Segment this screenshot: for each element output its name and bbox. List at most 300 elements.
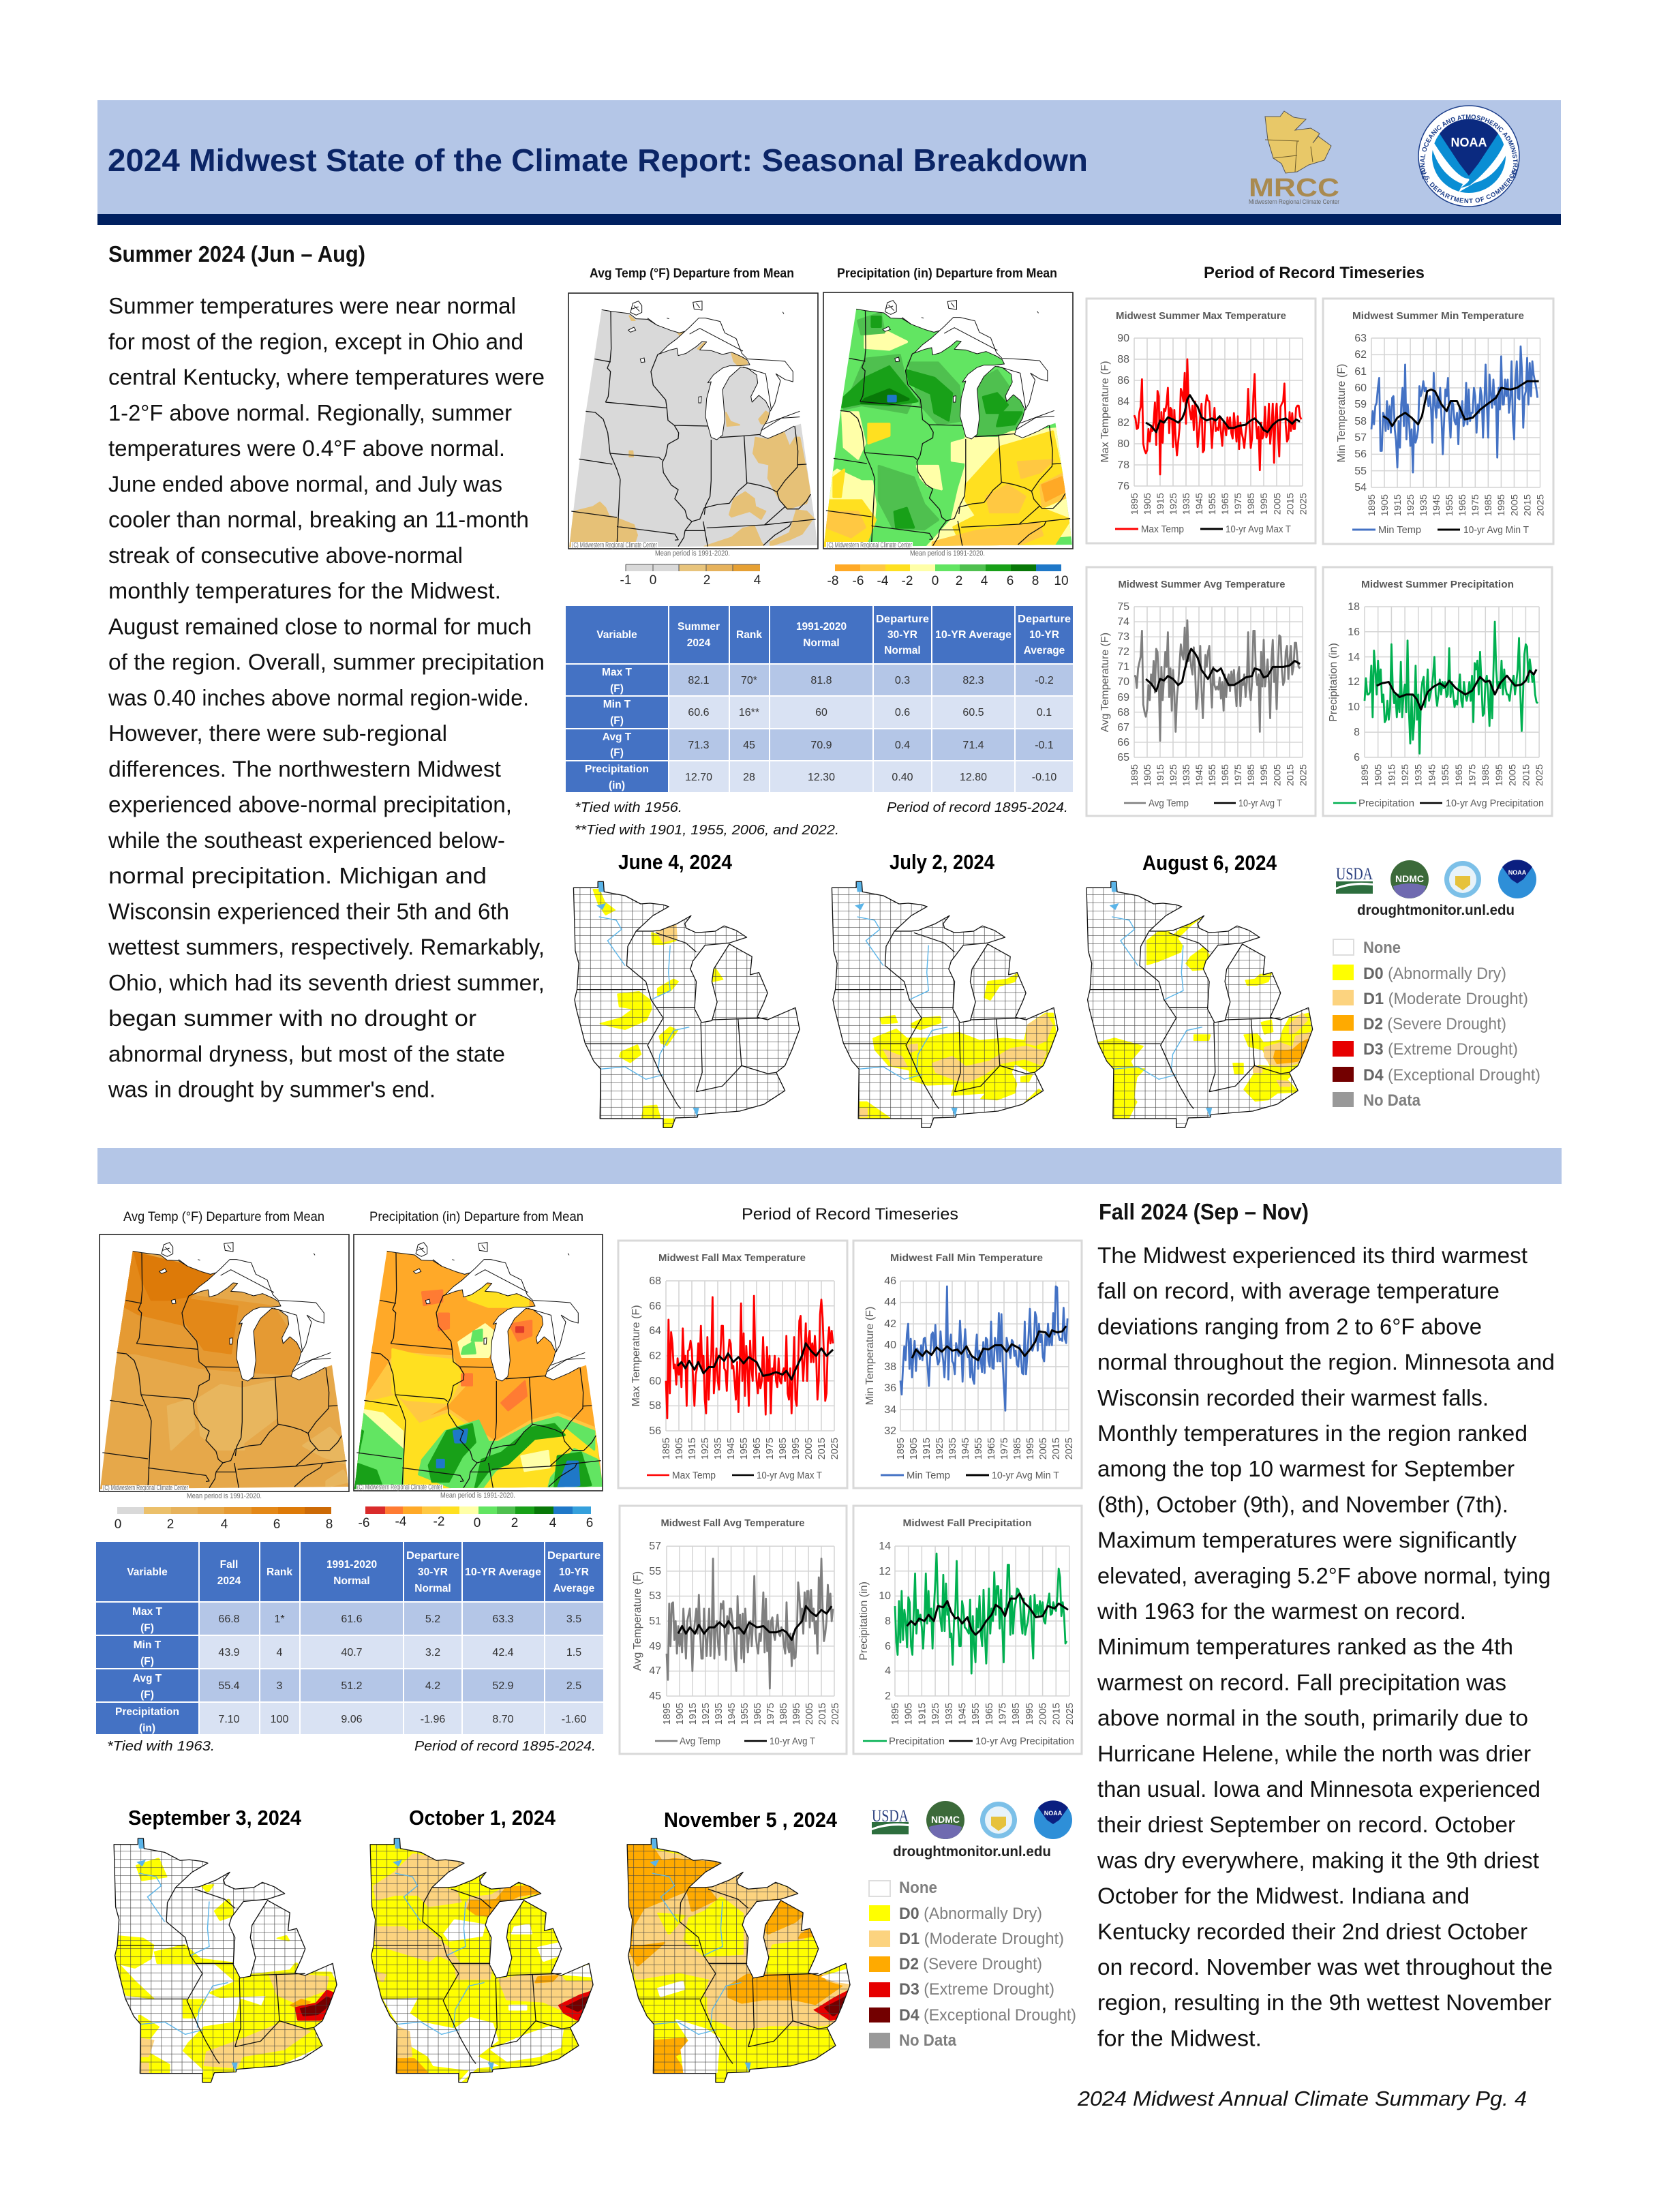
chart: Midwest Fall Avg Temperature: 45 <box>649 1691 661 1702</box>
chart: Midwest Fall Avg Temperature: 1975 <box>765 1703 776 1725</box>
table: fall statistics: 7.10 <box>218 1714 240 1725</box>
colour legend: summer temperature: -1 <box>620 573 631 588</box>
table: fall statistics: 4 <box>277 1647 283 1658</box>
chart: Midwest Fall Precipitation: Midwest Fall Precipitation <box>902 1517 1032 1529</box>
text block: fall summary: Wisconsin recorded their warmest falls. <box>1097 1385 1489 1410</box>
chart: Midwest Summer Avg Temperature: 1985 <box>1246 764 1257 786</box>
colour legend: fall temperature: 4 <box>221 1517 228 1532</box>
map panel: summer precipitation departure <box>814 267 1078 558</box>
logos: drought monitor partners, fall: NOAA <box>1044 1810 1063 1817</box>
chart: Midwest Fall Avg Temperature: 49 <box>649 1641 661 1652</box>
chart: Midwest Summer Min Temperature: 2015 <box>1522 494 1533 516</box>
table: fall statistics: Rank <box>267 1566 292 1578</box>
chart: Midwest Summer Precipitation: 2005 <box>1508 764 1519 786</box>
chart: Midwest Fall Min Temperature: 2025 <box>1064 1438 1075 1459</box>
chart: Midwest Summer Precipitation: 1895 <box>1360 764 1371 786</box>
chart: Midwest Summer Precipitation: Precipitation (in) <box>1328 643 1339 722</box>
drought map: October 1, 2024 <box>356 1825 603 2095</box>
heading: period of record timeseries, summer: Period of Record Timeseries <box>1204 264 1425 282</box>
header banner <box>0 0 1561 225</box>
chart: Midwest Fall Precipitation: 12 <box>879 1566 891 1577</box>
text block: summer summary: However, there were sub-regional <box>108 721 447 746</box>
chart: Midwest Summer Min Temperature: 1975 <box>1470 494 1481 516</box>
chart: Midwest Summer Min Temperature: 55 <box>1354 466 1367 477</box>
chart: Midwest Summer Min Temperature: 59 <box>1354 399 1367 410</box>
chart: Midwest Fall Max Temperature: 68 <box>649 1275 661 1287</box>
chart: Midwest Summer Max Temperature: 76 <box>1117 481 1129 492</box>
map panel: fall precipitation departure: Mean period is 1991-2020. <box>440 1491 515 1500</box>
chart: Midwest Fall Precipitation: 1945 <box>957 1703 968 1725</box>
drought map: November 5, 2024 <box>613 1825 860 2095</box>
chart: Midwest Fall Min Temperature: 1975 <box>999 1438 1010 1459</box>
chart: Midwest Fall Precipitation: 2025 <box>1065 1703 1076 1725</box>
table: summer statistics: Normal <box>803 637 840 649</box>
table: fall statistics: 55.4 <box>218 1680 240 1692</box>
chart: Midwest Fall Min Temperature: 40 <box>884 1339 896 1351</box>
chart: Midwest Summer Avg Temperature: 2005 <box>1272 764 1283 786</box>
page footer: 2024 Midwest Annual Climate Summary Pg. 4 <box>1077 2087 1527 2110</box>
heading: November 5, 2024: November 5 , 2024 <box>664 1808 838 1832</box>
chart: Midwest Summer Avg Temperature: 68 <box>1117 707 1129 718</box>
chart: Midwest Fall Avg Temperature: 1925 <box>701 1703 712 1725</box>
chart: Midwest Fall Precipitation: 6 <box>885 1641 891 1652</box>
chart: Midwest Summer Avg Temperature <box>1086 567 1316 816</box>
table: summer statistics: 10-YR <box>1029 629 1059 641</box>
table: summer statistics: 71.4 <box>962 740 984 751</box>
map panel: summer precipitation departure: (C) Midwestern Regional Climate Center <box>827 541 912 549</box>
text block: fall summary <box>1097 1243 1555 2050</box>
table: summer statistics: 70.9 <box>810 740 832 751</box>
chart: Midwest Fall Max Temperature: 1975 <box>765 1438 776 1459</box>
chart: Midwest Fall Precipitation: 8 <box>885 1616 891 1627</box>
chart: Midwest Fall Max Temperature: 2025 <box>830 1438 840 1459</box>
text block: fall summary: Monthly temperatures in the region ranked <box>1097 1421 1527 1446</box>
chart: Midwest Fall Max Temperature: 62 <box>649 1350 661 1362</box>
chart: Midwest Fall Min Temperature: 34 <box>884 1404 896 1416</box>
logos: drought monitor partners, fall: droughtmonitor.unl.edu <box>893 1844 1051 1860</box>
chart: Midwest Fall Avg Temperature: Avg Temp <box>680 1736 720 1747</box>
chart: Midwest Summer Min Temperature: 61 <box>1354 366 1367 378</box>
table: fall statistics: Variable <box>127 1566 168 1578</box>
text block: fall summary: among the top 10 warmest for September <box>1097 1456 1515 1481</box>
table: summer statistics: 82.3 <box>962 675 984 686</box>
chart: Midwest Summer Min Temperature: 57 <box>1354 432 1367 444</box>
chart: Midwest Summer Avg Temperature: 1995 <box>1259 764 1270 786</box>
text block: summer summary: June ended above normal, and July was <box>108 471 502 496</box>
map panel: summer average temperature departure: (C) Midwestern Regional Climate Center <box>572 541 657 549</box>
table: fall statistics: (F) <box>140 1622 154 1634</box>
chart: Midwest Fall Avg Temperature: 57 <box>649 1541 661 1552</box>
text block: summer summary: of the region. Overall, summer precipitation <box>108 649 545 675</box>
table: fall statistics: 8.70 <box>492 1714 514 1725</box>
chart: Midwest Summer Max Temperature: 1905 <box>1142 493 1153 515</box>
table: fall statistics: Normal <box>333 1575 370 1587</box>
chart: Midwest Fall Min Temperature: 10-yr Avg Min T <box>992 1470 1059 1481</box>
text block: summer summary: cooler than normal, breaking an 11-month <box>108 507 529 532</box>
table: fall statistics: 40.7 <box>341 1647 363 1658</box>
chart: Midwest Summer Min Temperature: 54 <box>1354 482 1367 494</box>
colour legend: fall precipitation: -6 <box>359 1516 369 1530</box>
chart: Midwest Summer Max Temperature: 1975 <box>1233 493 1244 515</box>
colour legend: summer precipitation: -2 <box>902 574 913 588</box>
chart: Midwest Summer Max Temperature: 1945 <box>1194 493 1205 515</box>
table: fall statistics: (F) <box>140 1689 154 1701</box>
legend: drought categories, fall: D2 (Severe Drought) <box>899 1955 1042 1973</box>
chart: Midwest Summer Avg Temperature: 70 <box>1117 676 1129 688</box>
text block: summer summary: experienced above-normal precipitation, <box>108 792 512 817</box>
text block: fall summary: normal throughout the region. Minnesota and <box>1097 1350 1555 1375</box>
chart: Midwest Summer Min Temperature: 1985 <box>1483 494 1494 516</box>
chart: Midwest Summer Max Temperature: 2025 <box>1298 493 1309 515</box>
legend: drought categories, fall: D1 (Moderate Drought) <box>899 1930 1064 1948</box>
legend: drought categories, summer: None <box>1363 939 1401 957</box>
table: summer statistics: Max T <box>602 667 632 678</box>
text block: summer summary: differences. The northwestern Midwest <box>108 756 501 781</box>
table: fall statistics: 5.2 <box>425 1613 440 1625</box>
chart: Midwest Summer Avg Temperature: 71 <box>1117 661 1129 673</box>
table: summer statistics: 81.8 <box>810 675 832 686</box>
chart: Midwest Summer Min Temperature: Midwest Summer Min Temperature <box>1352 310 1524 322</box>
map panel: fall average temperature departure: Mean period is 1991-2020. <box>187 1492 262 1500</box>
colour legend: summer precipitation: -4 <box>877 574 889 588</box>
legend: drought categories, summer: D3 (Extreme Drought) <box>1363 1040 1518 1059</box>
text block: summer summary: was in drought by summer's end. <box>108 1077 436 1102</box>
chart: Midwest Fall Max Temperature: 60 <box>649 1376 661 1387</box>
chart: Midwest Summer Avg Temperature: 1945 <box>1194 764 1205 786</box>
chart: Midwest Fall Max Temperature: 1925 <box>700 1438 711 1459</box>
chart: Midwest Summer Max Temperature: 10-yr Avg Max T <box>1226 524 1291 535</box>
table: fall statistics: Avg T <box>133 1673 162 1684</box>
chart: Midwest Summer Min Temperature: 2005 <box>1509 494 1520 516</box>
legend: drought categories, summer: D4 (Exceptional Drought) <box>1363 1066 1540 1085</box>
chart: Midwest Summer Max Temperature: 78 <box>1117 459 1129 471</box>
table: summer statistics: (F) <box>610 683 624 695</box>
chart: Midwest Fall Avg Temperature: 53 <box>649 1590 661 1602</box>
table: summer statistics: 0.4 <box>895 740 910 751</box>
table: summer statistics: (F) <box>610 715 624 727</box>
chart: Midwest Summer Max Temperature: 1985 <box>1246 493 1257 515</box>
table: summer statistics: Precipitation <box>585 763 649 775</box>
legend: drought categories, fall: D0 (Abnormally Dry) <box>899 1905 1042 1923</box>
chart: Midwest Summer Avg Temperature: 1965 <box>1220 764 1231 786</box>
chart: Midwest Fall Avg Temperature: 1995 <box>791 1703 802 1725</box>
chart: Midwest Summer Min Temperature: Min Temperature (F) <box>1336 364 1348 462</box>
chart: Midwest Summer Precipitation: 8 <box>1354 727 1360 738</box>
chart: Midwest Fall Min Temperature: Min Temp <box>907 1470 950 1481</box>
table: fall statistics: (in) <box>139 1723 155 1734</box>
map panel: summer precipitation departure: Mean period is 1991-2020. <box>910 549 985 558</box>
table: summer statistics: -0.2 <box>1035 675 1054 686</box>
text block: summer summary: August remained close to normal for much <box>108 613 532 639</box>
colour legend: fall temperature: 2 <box>167 1517 174 1532</box>
chart: Midwest Fall Precipitation: 1965 <box>984 1703 995 1725</box>
heading: July 2, 2024: July 2, 2024 <box>890 850 995 874</box>
table: fall statistics <box>96 1542 603 1734</box>
table: fall statistics: Normal <box>414 1583 451 1594</box>
chart: Midwest Summer Max Temperature: 84 <box>1117 396 1129 408</box>
chart: Midwest Fall Min Temperature: 1965 <box>986 1438 997 1459</box>
table: fall statistics: 61.6 <box>341 1613 363 1625</box>
chart: Midwest Summer Precipitation: 16 <box>1348 626 1360 638</box>
text block: summer summary: wettest summers, respectively. Remarkably, <box>108 934 545 960</box>
chart: Midwest Fall Avg Temperature: Midwest Fall Avg Temperature <box>661 1517 804 1529</box>
chart: Midwest Summer Avg Temperature: 2025 <box>1298 764 1309 786</box>
chart: Midwest Summer Avg Temperature: 2015 <box>1285 764 1296 786</box>
chart: Midwest Summer Precipitation: 1965 <box>1454 764 1465 786</box>
chart: Midwest Fall Avg Temperature: 1965 <box>753 1703 763 1725</box>
chart: Midwest Fall Avg Temperature: 1905 <box>675 1703 686 1725</box>
table: summer statistics: 12.30 <box>808 772 835 783</box>
chart: Midwest Fall Max Temperature: 10-yr Avg Max T <box>757 1470 822 1481</box>
table: summer statistics: Departure <box>876 613 929 625</box>
table: summer statistics: (F) <box>610 747 624 759</box>
chart: Midwest Fall Max Temperature: Max Temp <box>672 1470 716 1481</box>
table: summer statistics: -0.10 <box>1032 772 1056 783</box>
table: fall statistics: 30-YR <box>418 1566 448 1578</box>
chart: Midwest Summer Min Temperature: 1935 <box>1418 494 1429 516</box>
chart: Midwest Summer Avg Temperature: 1955 <box>1207 764 1218 786</box>
colour legend: summer temperature <box>620 564 761 588</box>
chart: Midwest Fall Precipitation: 1955 <box>971 1703 982 1725</box>
chart: Midwest Fall Min Temperature: 1955 <box>973 1438 984 1459</box>
table: summer statistics: 82.1 <box>688 675 710 686</box>
colour legend: summer precipitation: 10 <box>1054 574 1069 588</box>
table: fall statistics: (F) <box>140 1656 154 1667</box>
map panel: summer average temperature departure <box>559 267 823 558</box>
chart: Midwest Fall Min Temperature <box>853 1241 1082 1488</box>
chart: Midwest Fall Min Temperature: 42 <box>884 1318 896 1330</box>
text block: summer summary: monthly temperatures for the Midwest. <box>108 578 501 603</box>
chart: Midwest Fall Min Temperature: 44 <box>884 1297 896 1308</box>
chart: Midwest Summer Precipitation: 1995 <box>1494 764 1505 786</box>
chart: Midwest Fall Precipitation: 10 <box>879 1590 891 1602</box>
colour legend: fall precipitation: 6 <box>586 1516 593 1530</box>
table: summer statistics: 0.40 <box>892 772 913 783</box>
chart: Midwest Summer Precipitation: 1915 <box>1386 764 1397 786</box>
table: fall statistics: 100 <box>271 1714 288 1725</box>
logo: MRCC <box>1249 111 1339 205</box>
chart: Midwest Summer Avg Temperature: 74 <box>1117 616 1129 628</box>
chart: Midwest Summer Min Temperature: 10-yr Avg Min T <box>1463 524 1529 536</box>
colour legend: fall precipitation: 0 <box>474 1516 481 1530</box>
logos: drought monitor partners, fall <box>872 1800 1072 1860</box>
chart: Midwest Summer Min Temperature: 63 <box>1354 333 1367 344</box>
chart: Midwest Fall Max Temperature: 1945 <box>726 1438 737 1459</box>
table: fall statistics: 51.2 <box>341 1680 363 1692</box>
chart: Midwest Fall Max Temperature: 58 <box>649 1400 661 1412</box>
table: summer statistics: 28 <box>743 772 755 783</box>
colour legend: summer precipitation <box>827 564 1069 588</box>
table: fall statistics: -1.60 <box>562 1714 586 1725</box>
table: summer statistics: 60.6 <box>688 707 710 718</box>
table: fall statistics: 10-YR Average <box>465 1566 541 1578</box>
table: fall statistics: 10-YR <box>559 1566 589 1578</box>
table: summer statistics: -0.1 <box>1035 740 1054 751</box>
chart: Midwest Fall Precipitation: 1925 <box>930 1703 941 1725</box>
chart: Midwest Fall Precipitation: 1995 <box>1024 1703 1035 1725</box>
logos: drought monitor partners, summer: droughtmonitor.unl.edu <box>1357 903 1515 918</box>
heading: Fall 2024: Fall 2024 (Sep – Nov) <box>1099 1199 1309 1224</box>
chart: Midwest Fall Precipitation: 1975 <box>998 1703 1009 1725</box>
chart: Midwest Fall Max Temperature <box>618 1241 847 1488</box>
chart: Midwest Summer Min Temperature: 56 <box>1354 449 1367 460</box>
table footnotes: fall: *Tied with 1963. <box>107 1739 215 1754</box>
chart: Midwest Fall Min Temperature: 1895 <box>896 1438 907 1459</box>
table: summer statistics: 0.1 <box>1037 707 1052 718</box>
text block: summer summary: Summer temperatures were near normal <box>108 293 516 318</box>
text block: fall summary: Hurricane Helene, while the north was drier <box>1097 1741 1531 1766</box>
legend: drought categories, fall: No Data <box>899 2031 957 2050</box>
chart: Midwest Fall Max Temperature: 1915 <box>687 1438 698 1459</box>
text block: summer summary: while the southeast experienced below- <box>108 828 505 853</box>
chart: Midwest Summer Precipitation: 1945 <box>1427 764 1438 786</box>
chart: Midwest Fall Precipitation: 2005 <box>1038 1703 1049 1725</box>
text block: fall summary: on record. November was wet throughout the <box>1097 1954 1553 1980</box>
table: summer statistics: 0.6 <box>895 707 910 718</box>
text block: summer summary <box>108 293 545 1102</box>
text block: fall summary: with 1963 for the warmest on record. <box>1097 1599 1466 1624</box>
heading: Summer 2024: Summer 2024 (Jun – Aug) <box>108 241 365 267</box>
chart: Midwest Summer Max Temperature: 2005 <box>1272 493 1283 515</box>
chart: Midwest Summer Max Temperature: Midwest Summer Max Temperature <box>1116 310 1286 322</box>
chart: Midwest Fall Min Temperature: 2015 <box>1051 1438 1062 1459</box>
logo: MRCC: Midwestern Regional Climate Center <box>1249 198 1339 205</box>
chart: Midwest Summer Avg Temperature: 75 <box>1117 601 1129 613</box>
logos: drought monitor partners, fall: USDA <box>872 1807 909 1825</box>
chart: Midwest Summer Min Temperature: 1915 <box>1393 494 1403 516</box>
table: summer statistics: 12.70 <box>685 772 712 783</box>
chart: Midwest Summer Precipitation: Precipitation <box>1358 798 1414 809</box>
table: fall statistics: Departure <box>547 1550 601 1562</box>
logo: NOAA: U.S. DEPARTMENT OF COMMERCE <box>1422 169 1517 203</box>
table: fall statistics: Min T <box>134 1639 162 1651</box>
chart: Midwest Fall Avg Temperature: 1945 <box>727 1703 738 1725</box>
map panel: fall precipitation departure <box>344 1210 609 1500</box>
chart: Midwest Summer Avg Temperature: 1935 <box>1181 764 1192 786</box>
chart: Midwest Fall Min Temperature: Midwest Fall Min Temperature <box>890 1252 1043 1264</box>
report title: 2024 Midwest State of the Climate Report: Seasonal Breakdown <box>108 142 1088 178</box>
colour legend: summer precipitation: 8 <box>1032 574 1039 588</box>
chart: Midwest Summer Precipitation <box>1323 567 1552 816</box>
colour legend: summer temperature: 4 <box>754 573 761 588</box>
map panel: fall precipitation departure: Precipitation (in) Departure from Mean <box>369 1210 583 1224</box>
chart: Midwest Fall Max Temperature: 1995 <box>791 1438 802 1459</box>
table: fall statistics: Precipitation <box>115 1706 179 1718</box>
map panel: fall precipitation departure: (C) Midwestern Regional Climate Center <box>357 1483 442 1491</box>
chart: Midwest Fall Avg Temperature <box>620 1506 847 1754</box>
colour legend: summer precipitation: -6 <box>853 574 864 588</box>
chart: Midwest Summer Avg Temperature: 67 <box>1117 722 1129 733</box>
chart: Midwest Fall Min Temperature: 1945 <box>960 1438 971 1459</box>
text block: summer summary: Wisconsin experienced their 5th and 6th <box>108 898 509 924</box>
chart: Midwest Summer Max Temperature: 1955 <box>1207 493 1218 515</box>
chart: Midwest Summer Precipitation: 18 <box>1348 601 1360 613</box>
table: summer statistics: 16** <box>739 707 759 718</box>
legend: drought categories, summer: D1 (Moderate Drought) <box>1363 990 1528 1008</box>
text block: fall summary: above normal in the south, primarily due to <box>1097 1706 1528 1731</box>
text block: fall summary: fall on record, with average temperature <box>1097 1278 1500 1303</box>
chart: Midwest Summer Max Temperature: Max Temp <box>1141 524 1184 535</box>
drought map: August 6, 2024 <box>1086 881 1313 1128</box>
chart: Midwest Fall Avg Temperature: 2005 <box>804 1703 815 1725</box>
chart: Midwest Summer Avg Temperature: 1905 <box>1142 764 1153 786</box>
text block: fall summary: October for the Midwest. Indiana and <box>1097 1883 1470 1909</box>
chart: Midwest Fall Avg Temperature: 1985 <box>778 1703 789 1725</box>
chart: Midwest Fall Max Temperature: 1905 <box>674 1438 685 1459</box>
legend: drought categories, summer: D0 (Abnormally Dry) <box>1363 965 1506 983</box>
table: fall statistics: 3 <box>277 1680 283 1692</box>
table: fall statistics: 1991-2020 <box>326 1559 377 1571</box>
table: fall statistics: 66.8 <box>218 1613 240 1625</box>
section divider band <box>97 1148 1562 1184</box>
table: fall statistics: 42.4 <box>492 1647 514 1658</box>
table: fall statistics: 9.06 <box>341 1714 363 1725</box>
table: fall statistics: 2.5 <box>566 1680 581 1692</box>
chart: Midwest Summer Max Temperature: 86 <box>1117 375 1129 387</box>
chart: Midwest Summer Avg Temperature: 1915 <box>1155 764 1166 786</box>
drought map: September 3, 2024 <box>100 1825 346 2086</box>
legend: drought categories, fall: None <box>899 1879 937 1897</box>
text block: fall summary: was dry everywhere, making it the 9th driest <box>1097 1847 1539 1873</box>
logo: MRCC: MRCC <box>1249 174 1339 202</box>
colour legend: summer precipitation: -8 <box>827 574 838 588</box>
chart: Midwest Fall Min Temperature: 46 <box>884 1275 896 1287</box>
table: summer statistics <box>566 606 1073 792</box>
table: fall statistics: 4.2 <box>425 1680 440 1692</box>
colour legend: summer precipitation: 0 <box>932 574 939 588</box>
chart: Midwest Summer Precipitation: 1985 <box>1480 764 1491 786</box>
chart: Midwest Summer Avg Temperature: 1925 <box>1168 764 1179 786</box>
chart: Midwest Summer Min Temperature: 1905 <box>1380 494 1390 516</box>
chart: Midwest Fall Max Temperature: 2005 <box>804 1438 815 1459</box>
legend: drought categories, summer: No Data <box>1363 1091 1421 1110</box>
text block: summer summary: began summer with no drought or <box>108 1005 476 1031</box>
chart: Midwest Fall Min Temperature: Min Temperature (F) <box>864 1307 876 1405</box>
table: fall statistics: Departure <box>406 1550 459 1562</box>
chart: Midwest Fall Avg Temperature: 1935 <box>714 1703 725 1725</box>
chart: Midwest Fall Min Temperature: 38 <box>884 1361 896 1373</box>
table footnotes: summer <box>575 800 1068 838</box>
logos: drought monitor partners, summer: NDMC <box>1395 873 1424 884</box>
colour legend: summer precipitation: 4 <box>981 574 988 588</box>
table: fall statistics: 52.9 <box>492 1680 514 1692</box>
text block: fall summary: deviations ranging from 2 to 6°F above <box>1097 1314 1482 1339</box>
chart: Midwest Summer Precipitation: 12 <box>1348 676 1360 688</box>
table: summer statistics: Normal <box>884 645 921 656</box>
legend: drought categories, fall <box>869 1879 1076 2050</box>
legend: drought categories, fall: D3 (Extreme Drought) <box>899 1980 1054 1999</box>
chart: Midwest Fall Avg Temperature: 2015 <box>817 1703 828 1725</box>
chart: Midwest Fall Max Temperature: Max Temperature (F) <box>630 1305 642 1407</box>
colour legend: fall precipitation: -4 <box>395 1515 407 1529</box>
chart: Midwest Summer Max Temperature: 1925 <box>1168 493 1179 515</box>
chart: Midwest Fall Precipitation: 10-yr Avg Precipitation <box>975 1736 1074 1747</box>
chart: Midwest Fall Min Temperature: 1925 <box>934 1438 945 1459</box>
chart: Midwest Summer Avg Temperature: 66 <box>1117 737 1129 748</box>
chart: Midwest Summer Min Temperature: 1965 <box>1457 494 1468 516</box>
chart: Midwest Summer Avg Temperature: 69 <box>1117 692 1129 703</box>
text block: fall summary: (8th), October (9th), and November (7th). <box>1097 1491 1508 1517</box>
chart: Midwest Summer Precipitation: 2025 <box>1534 764 1545 786</box>
text block: summer summary: central Kentucky, where temperatures were <box>108 364 545 390</box>
chart: Midwest Summer Avg Temperature: Avg Temperature (F) <box>1099 633 1111 732</box>
table: summer statistics: 0.3 <box>895 675 910 686</box>
chart: Midwest Fall Precipitation: 1895 <box>890 1703 901 1725</box>
text block: fall summary: Maximum temperatures were significantly <box>1097 1528 1517 1553</box>
chart: Midwest Fall Precipitation: 4 <box>885 1665 891 1677</box>
chart: Midwest Fall Precipitation: 1985 <box>1011 1703 1022 1725</box>
chart: Midwest Summer Min Temperature: 1945 <box>1431 494 1442 516</box>
